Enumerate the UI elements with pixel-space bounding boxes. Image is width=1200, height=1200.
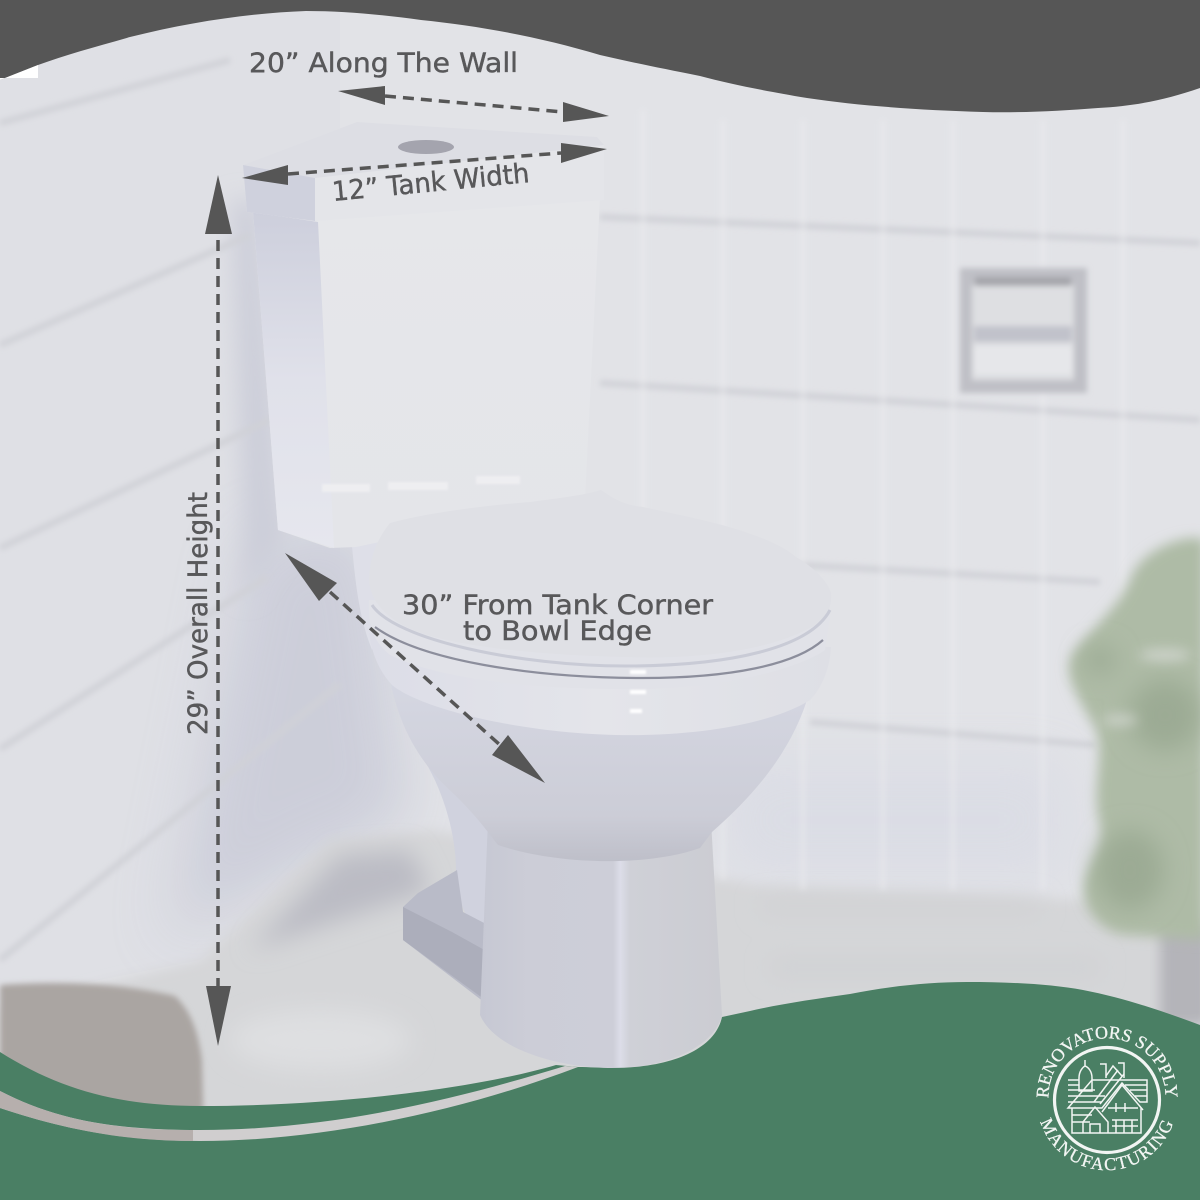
floor bbox=[0, 830, 1200, 1200]
tank lid bbox=[243, 122, 604, 221]
toilet bbox=[243, 122, 831, 1068]
logo: Renovators Supply Manufacturing bbox=[1036, 1026, 1178, 1170]
tank lower marks bbox=[322, 476, 520, 492]
flush button bbox=[398, 140, 454, 154]
label: along the wall: 20” Along The Wall bbox=[249, 48, 518, 79]
label: tank corner to bowl edge: to Bowl Edge bbox=[463, 616, 652, 647]
toilet pedestal bbox=[480, 820, 722, 1068]
dimension arrow: along the wall bbox=[338, 86, 609, 122]
toilet tank body bbox=[253, 198, 600, 548]
toilet rim bbox=[369, 633, 831, 735]
logo top text: RENOVATORS SUPPLY bbox=[1036, 1026, 1178, 1098]
label: overall height: 29” Overall Height bbox=[183, 492, 214, 735]
vertical panel stripes bbox=[640, 110, 1126, 890]
logo bottom text: MANUFACTURING bbox=[1040, 1117, 1172, 1170]
pot bbox=[1160, 925, 1200, 1025]
wall recess bbox=[960, 268, 1087, 393]
white corner notch bbox=[0, 65, 38, 80]
light strip bbox=[0, 1066, 578, 1141]
toilet bowl bbox=[390, 680, 810, 861]
wall grooves bbox=[0, 60, 1200, 960]
left wall shade bbox=[0, 0, 340, 1000]
corner shade near toilet bbox=[170, 520, 410, 940]
floor highlights bbox=[230, 1010, 410, 1070]
right wall lower tint bbox=[720, 760, 1070, 880]
logo house bbox=[1068, 1060, 1147, 1133]
dimension arrow: tank width bbox=[242, 143, 607, 185]
plant bbox=[1069, 538, 1200, 940]
top dark band bbox=[0, 0, 1200, 112]
logo ring bbox=[1054, 1048, 1160, 1152]
tank-to-bowl neck bbox=[352, 530, 400, 650]
dimension arrow: overall height bbox=[205, 175, 232, 1046]
dimension arrow: tank corner to bowl edge bbox=[285, 553, 545, 783]
label: tank width: 12” Tank Width bbox=[331, 158, 531, 208]
bottom green wave bbox=[0, 982, 1200, 1200]
toilet trapway bbox=[417, 750, 500, 930]
label: tank corner to bowl edge: 30” From Tank Corner bbox=[402, 590, 714, 621]
toilet base foot bbox=[403, 870, 488, 1002]
toilet seat bbox=[369, 490, 831, 657]
basket bbox=[0, 983, 205, 1180]
green fill bbox=[0, 982, 1200, 1200]
rim highlights bbox=[630, 672, 646, 711]
floor shadows bbox=[250, 850, 1100, 975]
